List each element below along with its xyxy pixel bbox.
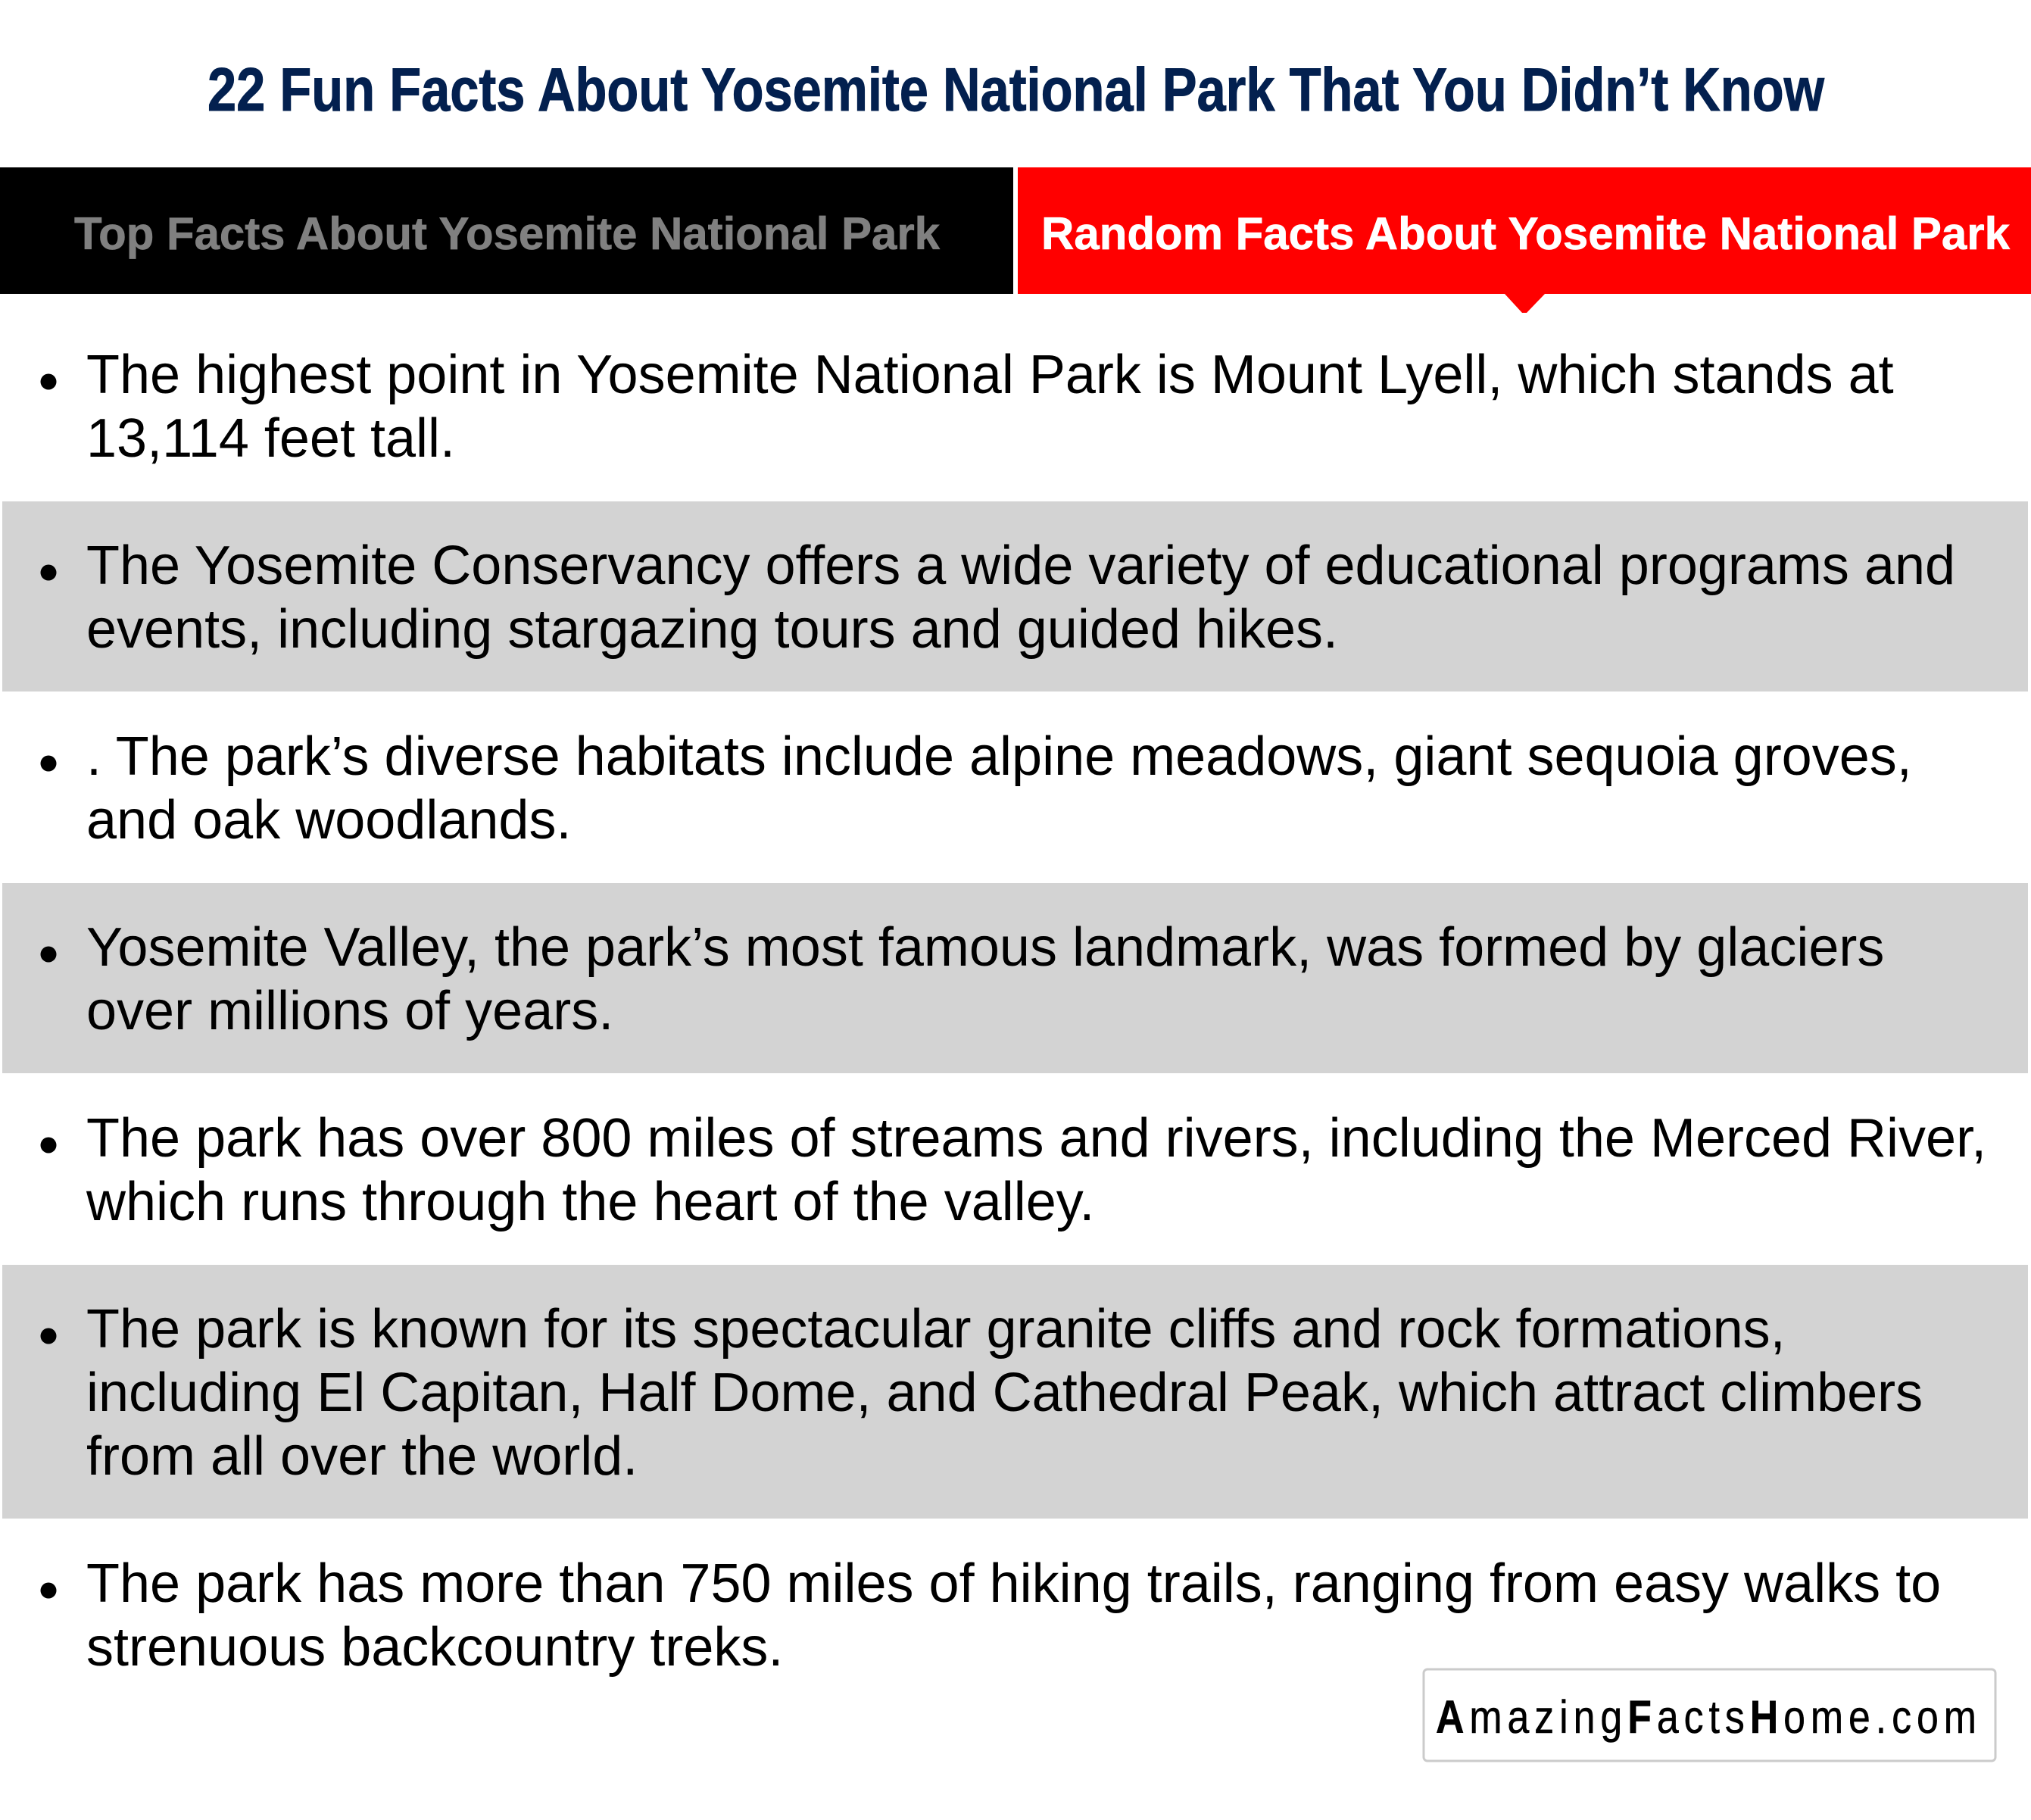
fact 7 [41, 1553, 1941, 1678]
fact 3 [41, 726, 1912, 851]
fact 4 panel: over millions of years. [86, 981, 613, 1041]
fact 3: . The park’s diverse habitats include alpine meadows, giant sequoia groves, [86, 726, 1912, 787]
logo badge [1424, 1669, 1995, 1761]
fact 6 panel: from all over the world. [86, 1426, 638, 1487]
tab: random facts [1018, 167, 2031, 313]
fact 2 panel: The Yosemite Conservancy offers a wide variety of educational programs and [86, 535, 1955, 596]
fact 4 panel [2, 883, 2028, 1073]
tab: random facts: Random Facts About Yosemite National Park [1041, 208, 2011, 259]
logo badge: AmazingFactsHome.com [1436, 1691, 1976, 1743]
fact 6 panel: The park is known for its spectacular granite cliffs and rock formations, [86, 1299, 1786, 1360]
fact 3: and oak woodlands. [86, 790, 571, 851]
tab: top facts [0, 167, 1013, 294]
fact 6 panel: including El Capitan, Half Dome, and Cathedral Peak, which attract climbers [86, 1363, 1923, 1423]
tab: top facts: Top Facts About Yosemite National Park [74, 208, 941, 259]
fact 1 [41, 345, 1894, 469]
fact 1: 13,114 feet tall. [86, 408, 455, 469]
fact 1: The highest point in Yosemite National Park is Mount Lyell, which stands at [86, 345, 1894, 405]
fact 2 panel: events, including stargazing tours and guided hikes. [86, 599, 1338, 660]
fact 5: The park has over 800 miles of streams and rivers, including the Merced River, [86, 1108, 1986, 1169]
fact 2 panel [2, 501, 2028, 691]
fact 7: strenuous backcountry treks. [86, 1617, 783, 1678]
fact 7: The park has more than 750 miles of hiking trails, ranging from easy walks to [86, 1553, 1941, 1614]
fact 5: which runs through the heart of the valley. [86, 1172, 1094, 1232]
fact 4 panel: Yosemite Valley, the park’s most famous landmark, was formed by glaciers [86, 917, 1884, 978]
fact 6 panel [2, 1265, 2028, 1519]
fact 5 [41, 1108, 1986, 1232]
